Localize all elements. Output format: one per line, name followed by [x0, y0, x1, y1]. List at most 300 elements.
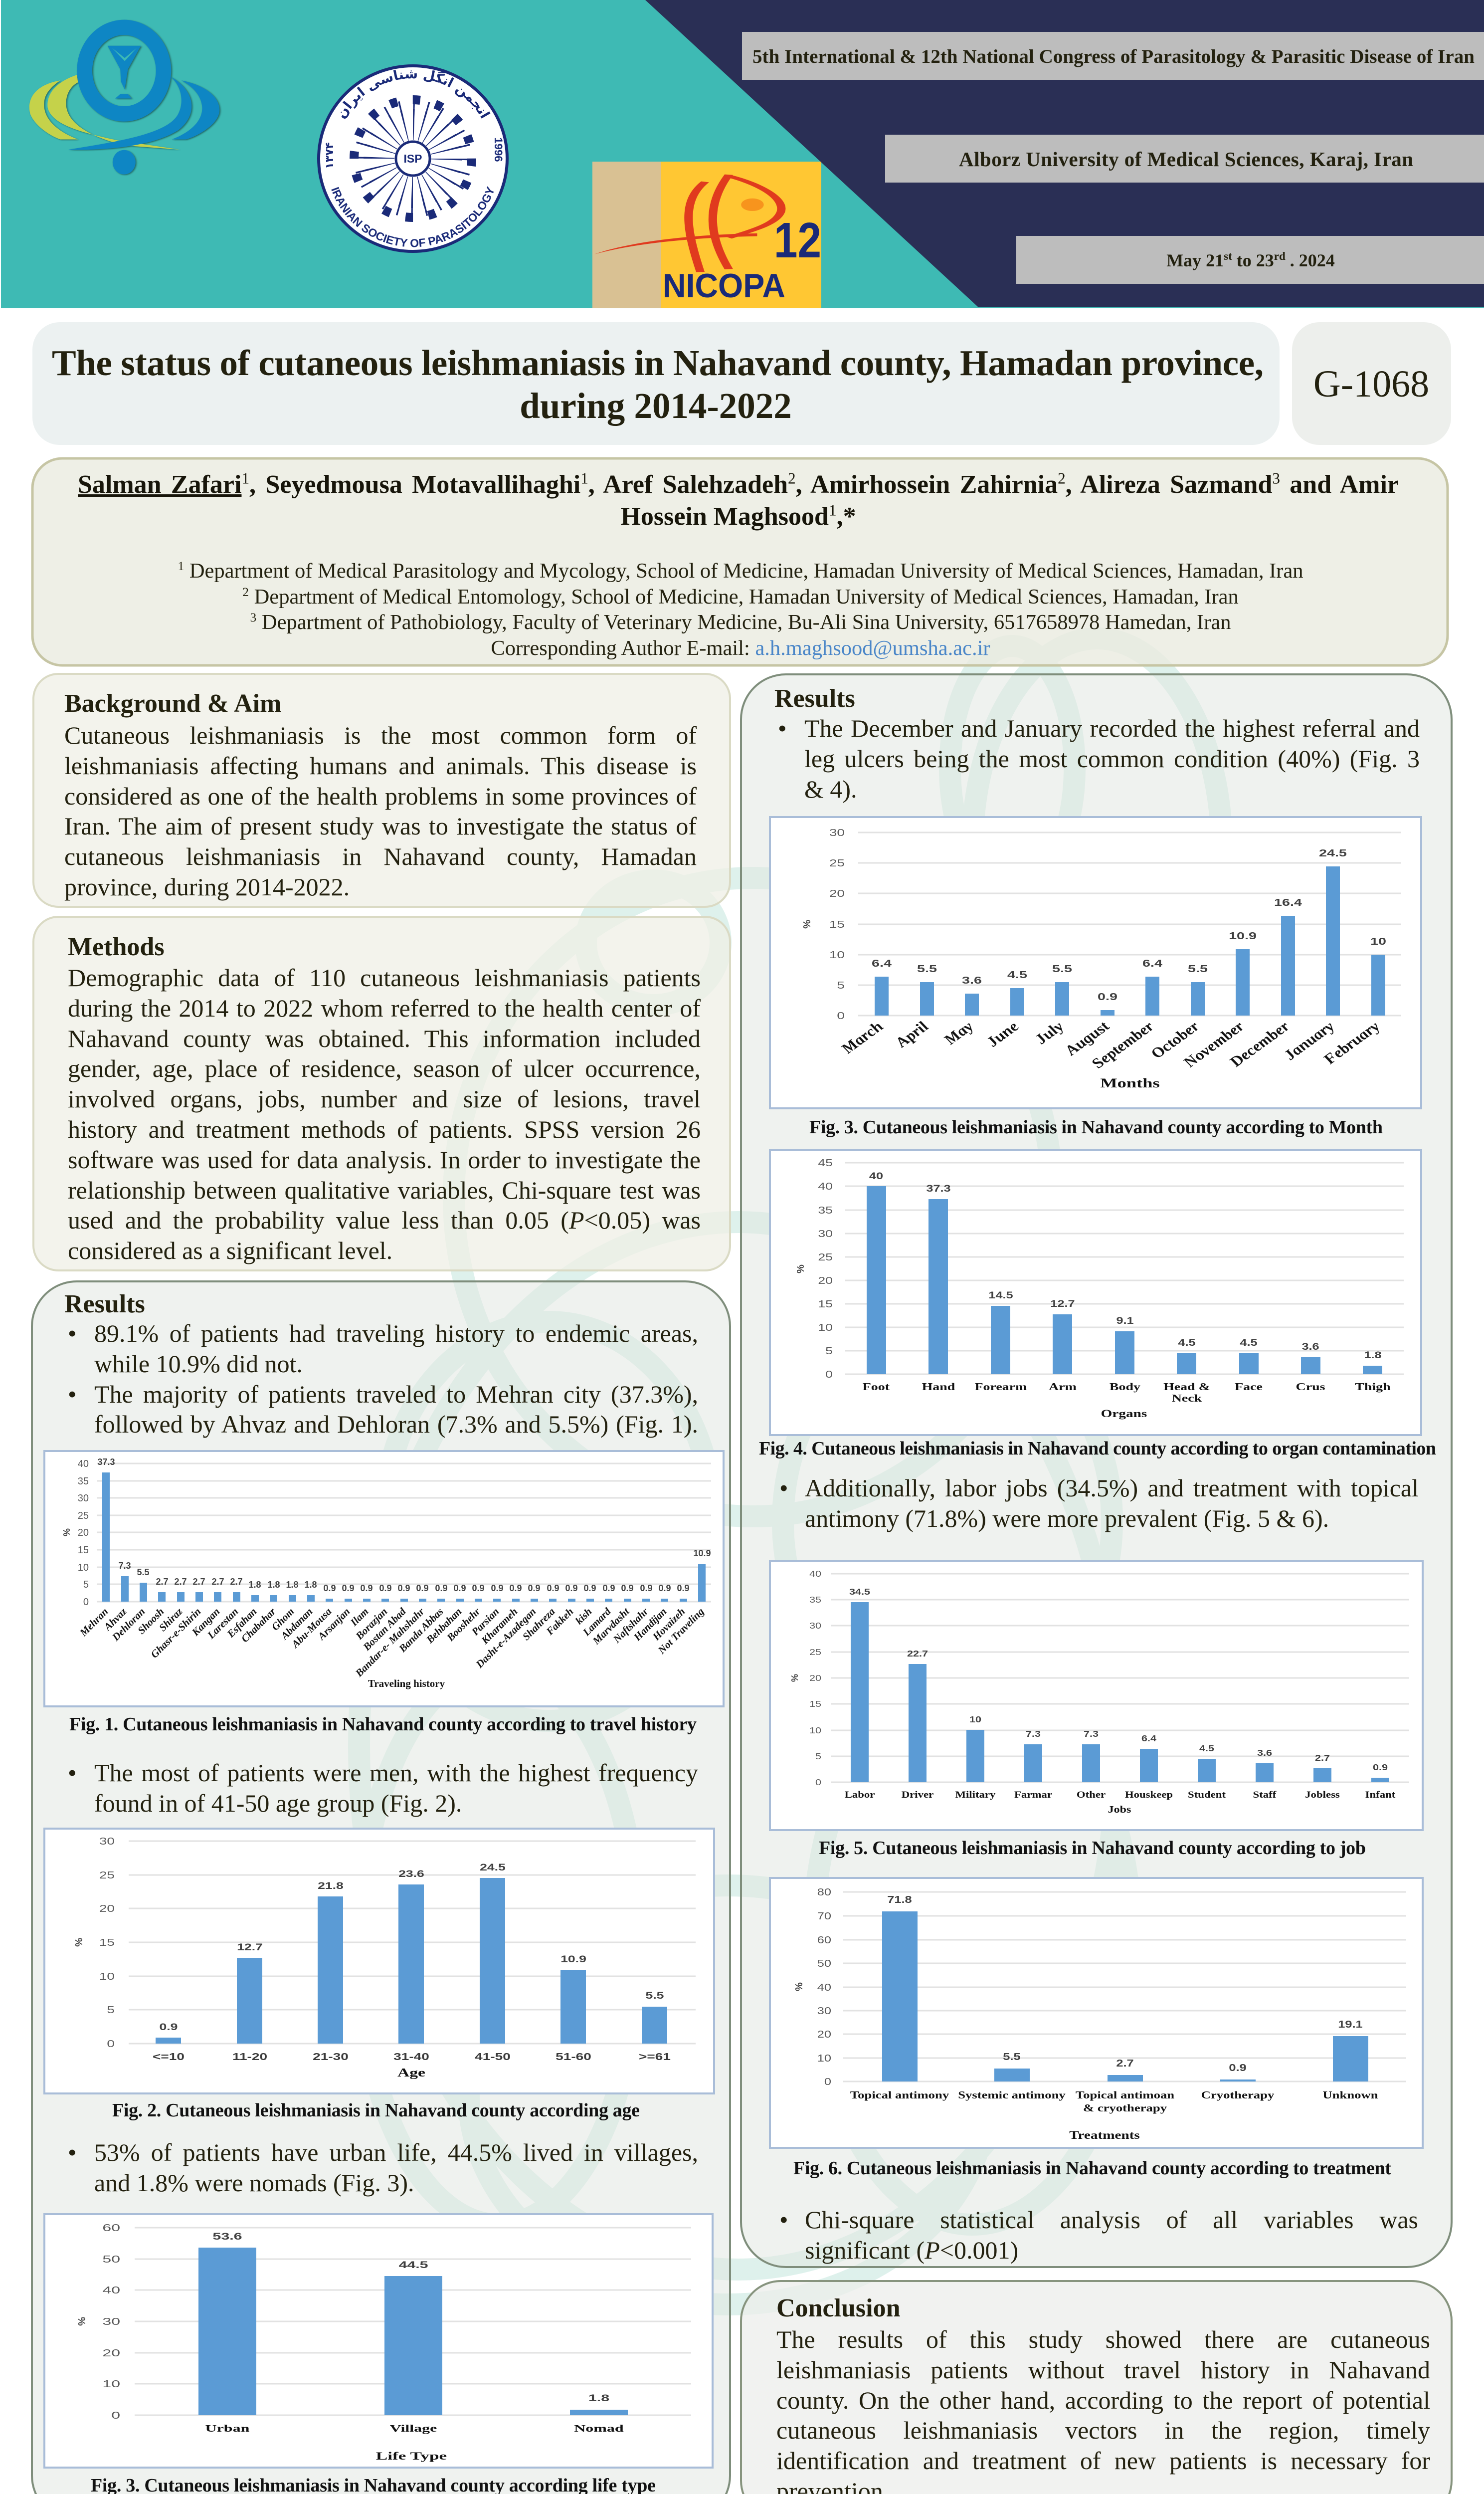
text block: chi-square bullet [779, 2205, 1418, 2267]
chart: figure 6 treatment: 0 [824, 2076, 831, 2087]
chart: figure 3 life type: Nomad [574, 2423, 624, 2434]
chart: figure 4 organs: Face [1235, 1381, 1263, 1393]
caption: figure 4: Fig. 4. Cutaneous leishmaniasis in Nahavand county according to organ contamination [759, 1438, 1436, 1459]
chart: figure 6 treatment: Systemic antimony [958, 2090, 1066, 2101]
text block: conclusion: leishmaniasis patients without travel history in Nahavand [776, 2356, 1430, 2384]
chart: figure 6 treatment: % [794, 1982, 805, 1991]
chart: figure 1 travel history: Ahvaz [101, 1605, 129, 1634]
chart: figure 1 travel history: 1.8 [267, 1580, 280, 1590]
panel: background and aim [33, 674, 730, 907]
chart: figure 5 jobs: Student [1188, 1789, 1226, 1800]
chart: figure 4 organs: % [795, 1264, 806, 1273]
text block: life type bullet: 53% of patients have urban life, 44.5% lived in villages, [94, 2138, 698, 2166]
chart: figure 1 travel history: 2.7 [156, 1577, 169, 1587]
text block: jobs and treatment bullet: Additionally, labor jobs (34.5%) and treatment with topical [805, 1474, 1419, 1502]
chart: months: August [1060, 1019, 1114, 1058]
chart: figure 5 jobs: 15 [809, 1699, 821, 1709]
chart: figure 6 treatment: 19.1 [1338, 2019, 1363, 2030]
chart: figure 5 jobs: 7.3 [1026, 1729, 1041, 1739]
chart: figure 1 travel history: Traveling history [368, 1677, 445, 1689]
chart: months: February [1318, 1019, 1385, 1067]
text block: travel history bullets: • [68, 1319, 77, 1347]
navy diagonal panel [645, 0, 1484, 307]
chart: figure 1 travel history: Hovaizeh [650, 1606, 688, 1643]
chart: figure 5 jobs: Military [955, 1789, 996, 1800]
text block: gender and age bullet: found in of 41-50 age group (Fig. 2). [94, 1789, 462, 1817]
chart: figure 5 jobs: 35 [809, 1595, 821, 1605]
university bar [885, 135, 1484, 183]
chart: figure 3 life type: 40 [102, 2285, 120, 2295]
chart: figure 4 organs: Body [1110, 1381, 1141, 1393]
chart: months: Months [1100, 1076, 1160, 1090]
chart: months: December [1225, 1019, 1295, 1070]
date bar [1016, 236, 1484, 284]
chart: figure 5 jobs: 0.9 [1373, 1763, 1388, 1773]
chart: figure 1 travel history: Esfahan [224, 1606, 259, 1640]
chart: figure 1 travel history: 35 [78, 1476, 89, 1487]
chart: figure 1 travel history: 0.9 [379, 1583, 392, 1593]
chart: figure 3 life type: Urban [205, 2423, 250, 2434]
chart: figure 4 organs: 1.8 [1364, 1350, 1382, 1360]
chart: figure 2 age: 21-30 [313, 2052, 349, 2063]
chart: figure 1 travel history: 5.5 [137, 1567, 150, 1577]
chart: months: 10.9 [1229, 930, 1257, 942]
chart: figure 1 travel history: Ghasr-e-Shirin [148, 1606, 203, 1661]
chart: figure 1 travel history: Abdanan [278, 1606, 315, 1643]
chart: figure 1 travel history: kish [573, 1606, 594, 1627]
text block: methods: used and the probability value less than 0.05 (P<0.05) was [68, 1206, 701, 1234]
chart: figure 6 treatment: Topical antimony [850, 2090, 949, 2101]
icon: congress logo [29, 20, 219, 175]
affiliations: 3 Department of Pathobiology, Faculty of Veterinary Medicine, Bu-Ali Sina University, 6517658978 Hamedan, Iran [250, 610, 1231, 634]
background watermark [359, 638, 1222, 2304]
chart: figure 3 life type: Village [390, 2423, 437, 2434]
chart: figure 1 travel history: 2.7 [230, 1577, 243, 1587]
text block: gender and age bullet: • [68, 1759, 77, 1787]
chart: figure 4 organs: 12.7 [1050, 1298, 1075, 1309]
chart: figure 3 life type: 20 [102, 2347, 120, 2358]
chart: figure 6 treatment [770, 1878, 1423, 2148]
chart: figure 6 treatment: 5.5 [1003, 2051, 1021, 2062]
chart: figure 5 jobs: Farmar [1014, 1789, 1052, 1800]
chart: figure 5 jobs: 22.7 [907, 1649, 928, 1659]
chart: figure 1 travel history: 0.9 [435, 1583, 448, 1593]
chart: months [770, 817, 1421, 1108]
chart: figure 4 organs: 35 [818, 1205, 833, 1216]
icon: NICOPA 12 logo: NICOPA [663, 267, 785, 305]
chart: figure 2 age: 21.8 [318, 1880, 344, 1891]
chart: figure 5 jobs: 25 [809, 1648, 821, 1658]
chart: figure 3 life type: 50 [102, 2254, 120, 2265]
chart: figure 4 organs: 9.1 [1116, 1315, 1134, 1326]
chart: figure 5 jobs: Houskeep [1125, 1789, 1173, 1800]
chart: figure 1 travel history: Shahreza [520, 1606, 557, 1643]
chart: figure 2 age: 30 [99, 1836, 115, 1847]
chart: figure 5 jobs: % [790, 1674, 800, 1682]
caption: figure 5: Fig. 5. Cutaneous leishmaniasis in Nahavand county according to job [819, 1838, 1366, 1859]
caption: figure 1: Fig. 1. Cutaneous leishmaniasis in Nahavand county according to travel history [69, 1714, 697, 1735]
chart: figure 1 travel history: 25 [78, 1510, 89, 1521]
chart: figure 6 treatment: 0.9 [1229, 2062, 1247, 2073]
text block: travel history bullets: while 10.9% did not. [94, 1350, 303, 1378]
chart: figure 2 age [44, 1829, 714, 2093]
chart: figure 4 organs: Forearm [975, 1381, 1027, 1393]
chart: figure 4 organs: 45 [818, 1157, 833, 1168]
chart: figure 6 treatment: 40 [817, 1982, 831, 1993]
chart: figure 5 jobs: 40 [809, 1569, 821, 1579]
chart: figure 4 organs: 4.5 [1178, 1337, 1196, 1348]
icon: NICOPA 12 logo: 12 [774, 212, 821, 268]
chart: months: 5.5 [1188, 963, 1208, 975]
text block: methods: relationship between qualitative variables, Chi-square test was [68, 1176, 701, 1204]
chart: figure 2 age: 5.5 [645, 1990, 664, 2001]
chart: figure 6 treatment: & cryotherapy [1083, 2103, 1167, 2114]
text block: methods: considered as a significant level. [68, 1237, 392, 1264]
chart: figure 4 organs: 40 [818, 1181, 833, 1192]
chart: figure 2 age: 20 [99, 1903, 115, 1914]
panel: conclusion [741, 2281, 1452, 2494]
chart: months: 15 [829, 919, 845, 930]
chart: figure 1 travel history: Bandar-e- Mahshahr [353, 1605, 427, 1679]
chart: figure 2 age: 0 [107, 2039, 115, 2050]
chart: figure 1 travel history: 0.9 [547, 1583, 559, 1593]
chart: figure 1 travel history: Behbahan [423, 1606, 464, 1646]
chart: figure 1 travel history: 2.7 [192, 1577, 205, 1587]
chart: figure 5 jobs: Infant [1365, 1789, 1395, 1800]
chart: figure 1 travel history: Lamard [580, 1605, 613, 1639]
chart: months: 10 [829, 950, 845, 961]
icon: Iranian Society of Parasitology seal: 1996 [492, 138, 505, 162]
text block: months and organs bullet: • [778, 714, 787, 742]
chart: figure 3 life type [44, 2214, 713, 2468]
text block: months and organs bullet: & 4). [804, 775, 857, 803]
chart: figure 1 travel history: Handijan [631, 1606, 669, 1644]
chart: figure 4 organs: Neck [1172, 1393, 1202, 1404]
chart: figure 5 jobs: Other [1077, 1789, 1106, 1800]
authors: Salman Zafari1, Seyedmousa Motavallihaghi1, Aref Salehzadeh2, Amirhossein Zahirnia2, Alireza Sazmand3 and Amir [78, 470, 1399, 499]
chart: figure 5 jobs: 6.4 [1141, 1734, 1156, 1744]
chart: figure 4 organs: Thigh [1355, 1381, 1391, 1393]
chart: figure 1 travel history: 0.9 [509, 1583, 522, 1593]
chart: months: 30 [829, 828, 845, 838]
text block: conclusion [776, 2324, 1430, 2494]
text block: gender and age bullet [68, 1758, 698, 1820]
chart: figure 1 travel history: Abu-Mousa [289, 1606, 334, 1651]
university bar: Alborz University of Medical Sciences, Karaj, Iran [959, 148, 1413, 171]
chart: figure 2 age: <=10 [153, 2052, 185, 2063]
chart: figure 1 travel history: 0.9 [640, 1583, 653, 1593]
chart: figure 3 life type: 60 [102, 2222, 120, 2233]
chart: figure 4 organs: 25 [818, 1251, 833, 1262]
chart: figure 2 age: 5 [107, 2005, 115, 2016]
heading: methods: Methods [68, 933, 165, 961]
chart: figure 1 travel history: 0.9 [360, 1583, 373, 1593]
seal: sunburst [354, 100, 472, 217]
chart: figure 2 age: 31-40 [393, 2052, 429, 2063]
text block: chi-square bullet: significant (P<0.001) [805, 2236, 1018, 2264]
chart: figure 5 jobs: 0 [815, 1778, 821, 1788]
chart: figure 5 jobs: Staff [1253, 1789, 1277, 1800]
heading: background and aim: Background & Aim [64, 689, 281, 718]
text block: methods: history and treatment methods of patients. SPSS version 26 [68, 1115, 701, 1143]
title text: The status of cutaneous leishmaniasis in Nahavand county, Hamadan province, [52, 343, 1264, 383]
chart: figure 4 organs: Crus [1296, 1381, 1325, 1393]
chart: months: 0 [837, 1011, 845, 1022]
chart: figure 6 treatment: Cryotherapy [1201, 2090, 1274, 2101]
text block: methods: during the 2014 to 2022 whom referred to the health center of [68, 994, 701, 1022]
chart: figure 2 age: 23.6 [398, 1869, 424, 1879]
chart: figure 2 age: 51-60 [556, 2052, 591, 2063]
chart: figure 4 organs: 4.5 [1240, 1337, 1258, 1348]
authors [78, 469, 1399, 534]
chart: figure 4 organs: 10 [818, 1322, 833, 1333]
chart: months: 6.4 [1142, 958, 1162, 969]
chart: figure 2 age: 0.9 [160, 2022, 178, 2032]
chart: figure 4 organs: 0 [825, 1369, 833, 1380]
chart: figure 1 travel history: 1.8 [304, 1580, 317, 1590]
chart: figure 1 travel history: 15 [78, 1545, 89, 1556]
chart: figure 1 travel history: 20 [78, 1527, 89, 1538]
chart: figure 4 organs: Organs [1101, 1407, 1147, 1420]
chart: figure 6 treatment: 71.8 [887, 1894, 912, 1905]
chart: figure 4 organs: Hand [922, 1381, 955, 1393]
panel: methods [33, 917, 730, 1270]
chart: figure 1 travel history: Chabahar [239, 1605, 278, 1645]
authors: Hossein Maghsood1,* [620, 502, 856, 531]
chart: months: October [1146, 1019, 1204, 1061]
chart: figure 3 life type: 53.6 [212, 2232, 242, 2242]
chart: months: 16.4 [1274, 897, 1302, 908]
chart: figure 5 jobs: 3.6 [1257, 1748, 1272, 1758]
text block: life type bullet: • [68, 2138, 77, 2166]
chart: figure 6 treatment: 60 [817, 1934, 831, 1945]
chart: figure 1 travel history: Shiraz [157, 1605, 185, 1634]
chart: figure 6 treatment: 10 [817, 2053, 831, 2064]
heading: results right: Results [774, 684, 855, 713]
text block: conclusion: cutaneous leishmaniasis vectors in the region, timely [776, 2416, 1430, 2444]
chart: figure 1 travel history: Bostan Abad [361, 1605, 408, 1653]
chart: figure 4 organs: 30 [818, 1228, 833, 1239]
affiliations [82, 558, 1399, 663]
chart: figure 1 travel history: Parsian [469, 1606, 502, 1638]
chart: months: November [1178, 1019, 1249, 1070]
chart: months: % [802, 920, 813, 929]
chart: figure 1 travel history: 0.9 [472, 1583, 485, 1593]
chart: figure 2 age: 10 [99, 1971, 115, 1982]
chart: figure 1 travel history: 0.9 [677, 1583, 690, 1593]
text block: methods: software was used for data analysis. In order to investigate the [68, 1146, 701, 1174]
chart: figure 5 jobs: 10 [969, 1715, 981, 1725]
chart: figure 2 age: 11-20 [232, 2052, 267, 2063]
text block: background: Iran. The aim of present study was to investigate the status of [64, 812, 697, 840]
chart: figure 3 life type: 44.5 [398, 2260, 428, 2270]
chart: figure 1 travel history: 0.9 [621, 1583, 634, 1593]
chart: figure 6 treatment: 2.7 [1116, 2058, 1134, 2069]
chart: figure 1 travel history: 10 [78, 1562, 89, 1573]
chart: figure 6 treatment: 70 [817, 1910, 831, 1921]
text block: travel history bullets: 89.1% of patients had traveling history to endemic areas, [94, 1319, 698, 1347]
chart: figure 1 travel history: 0.9 [323, 1583, 336, 1593]
chart: figure 1 travel history: 2.7 [211, 1577, 224, 1587]
text block: background [64, 720, 697, 905]
chart: figure 1 travel history: Fakkeh [544, 1606, 576, 1638]
chart: months: 5 [837, 980, 845, 991]
icon: Iranian Society of Parasitology seal: ISP [403, 152, 422, 165]
chart: figure 1 travel history: 0.9 [397, 1583, 410, 1593]
chart: figure 1 travel history: Banda Abbas [396, 1606, 446, 1655]
chart: figure 2 age: 12.7 [237, 1942, 263, 1952]
caption: figure 6: Fig. 6. Cutaneous leishmaniasis in Nahavand county according to treatment [793, 2158, 1391, 2179]
congress name bar [742, 32, 1484, 80]
chart: figure 1 travel history: 0 [83, 1597, 89, 1608]
title text [52, 343, 1264, 426]
chart: figure 1 travel history: Larestan [204, 1606, 241, 1642]
chart: figure 5 jobs: Jobless [1305, 1789, 1340, 1800]
chart: figure 1 travel history: Ghom [269, 1606, 297, 1633]
chart: figure 1 travel history: 5 [83, 1579, 89, 1590]
chart: months: 5.5 [917, 963, 937, 975]
chart: months: 0.9 [1098, 991, 1117, 1003]
chart: figure 4 organs: 20 [818, 1275, 833, 1286]
chart: months: 10 [1370, 936, 1386, 947]
chart: figure 2 age: 15 [99, 1937, 115, 1948]
chart: figure 1 travel history: 7.3 [118, 1561, 131, 1571]
chart: figure 5 jobs: 5 [815, 1752, 821, 1762]
text block: travel history bullets: The majority of patients traveled to Mehran city (37.3%), [94, 1380, 698, 1408]
chart: figure 4 organs: 3.6 [1301, 1341, 1319, 1352]
icon: Iranian Society of Parasitology seal: ۱۳۷۴ [324, 142, 336, 169]
chart: months: 20 [829, 888, 845, 899]
panel: authors and affiliations [32, 458, 1448, 665]
header banner [1, 0, 1484, 308]
icon: Iranian Society of Parasitology seal: انجمن انگل شناسی ایران [341, 70, 491, 119]
panel: results left column [32, 1281, 730, 2494]
chart: figure 1 travel history: 0.9 [528, 1583, 541, 1593]
chart: figure 5 jobs: 4.5 [1199, 1744, 1214, 1754]
text block: gender and age bullet: The most of patients were men, with the highest frequency [94, 1759, 698, 1787]
chart: figure 1 travel history: 0.9 [342, 1583, 355, 1593]
heading: results: Results [64, 1290, 145, 1318]
icon: Iranian Society of Parasitology seal [317, 64, 509, 253]
text block: chi-square bullet: Chi-square statistical analysis of all variables was [805, 2206, 1418, 2234]
chart: figure 4 organs: Foot [863, 1381, 890, 1393]
chart: figure 5 jobs: 2.7 [1315, 1753, 1330, 1763]
date bar: . 2024 [1286, 250, 1335, 270]
text block: life type bullet: and 1.8% were nomads (Fig. 3). [94, 2169, 414, 2197]
chart: figure 1 travel history: 10.9 [693, 1548, 711, 1558]
chart: figure 1 travel history: Arsanjan [315, 1606, 353, 1643]
chart: figure 1 travel history: Dasht-e-Azadegan [473, 1606, 539, 1670]
caption: figure 3 months: Fig. 3. Cutaneous leishmaniasis in Nahavand county according to Month [809, 1117, 1383, 1138]
icon: Iranian Society of Parasitology seal: IRANIAN SOCIETY OF PARASITOLOGY [331, 186, 494, 247]
chart: figure 5 jobs: 30 [809, 1621, 821, 1631]
chart: figure 6 treatment: Treatments [1069, 2129, 1140, 2141]
chart: months: April [890, 1020, 933, 1050]
text block: methods [68, 963, 701, 1268]
chart: figure 1 travel history: 40 [78, 1458, 89, 1469]
caption: figure 2: Fig. 2. Cutaneous leishmaniasis in Nahavand county according age [112, 2100, 640, 2121]
chart: figure 5 jobs: Jobs [1108, 1804, 1131, 1815]
date bar: to 23 [1232, 250, 1274, 270]
chart: figure 1 travel history: Kangan [189, 1606, 222, 1639]
chart: figure 1 travel history: Naftshahr [610, 1605, 651, 1646]
text block: jobs and treatment bullet: • [779, 1474, 788, 1502]
chart: figure 2 age: 25 [99, 1870, 115, 1881]
text block: methods: Demographic data of 110 cutaneous leishmaniasis patients [68, 964, 701, 992]
chart: months: 25 [829, 858, 845, 869]
chart: figure 5 jobs: Driver [902, 1789, 933, 1800]
congress name bar: 5th International & 12th National Congress of Parasitology & Parasitic Disease of Iran [752, 46, 1475, 67]
date bar: st [1224, 250, 1232, 262]
code panel: G-1068 [1292, 322, 1451, 445]
chart: figure 1 travel history: Mehran [77, 1606, 111, 1639]
chart: figure 1 travel history: 30 [78, 1493, 89, 1504]
chart: figure 6 treatment: 30 [817, 2005, 831, 2016]
chart: figure 2 age: Age [397, 2066, 425, 2079]
chart: figure 5 jobs: 7.3 [1084, 1729, 1099, 1739]
text block: conclusion: county. On the other hand, according to the report of potential [776, 2386, 1430, 2414]
chart: figure 2 age: 10.9 [560, 1954, 586, 1964]
chart: months: 3.6 [962, 975, 982, 986]
chart: figure 1 travel history: Booshehr [444, 1605, 483, 1644]
affiliations: 1 Department of Medical Parasitology and Mycology, School of Medicine, Hamadan University of Medical Sciences, Hamadan, Iran [178, 559, 1303, 583]
chart: figure 1 travel history: Ilam [348, 1606, 371, 1629]
text block: life type bullet [68, 2137, 698, 2199]
text block: months and organs bullet: leg ulcers being the most common condition (40%) (Fig. 3 [804, 745, 1420, 773]
chart: figure 1 travel history: Kharameh [479, 1606, 520, 1647]
text block: jobs and treatment bullet [779, 1473, 1419, 1535]
chart: figure 1 travel history: 37.3 [97, 1457, 115, 1467]
chart: figure 2 age: 41-50 [475, 2052, 511, 2063]
chart: figure 6 treatment: 20 [817, 2029, 831, 2040]
chart: figure 5 jobs: 20 [809, 1673, 821, 1683]
chart: figure 4 organs: 37.3 [926, 1183, 951, 1194]
heading: conclusion: Conclusion [776, 2294, 901, 2322]
chart: figure 1 travel history: 0.9 [453, 1583, 466, 1593]
date bar: May 21 [1166, 250, 1224, 270]
date bar: rd [1274, 250, 1286, 262]
chart: figure 2 age: >=61 [639, 2052, 671, 2063]
chart: figure 5 jobs: 10 [809, 1726, 821, 1736]
chart: figure 1 travel history [44, 1451, 724, 1706]
chart: figure 1 travel history: 0.9 [491, 1583, 504, 1593]
chart: months: July [1030, 1019, 1069, 1047]
chart: figure 3 life type: 1.8 [588, 2393, 609, 2403]
chart: figure 4 organs: Arm [1049, 1381, 1077, 1393]
text block: jobs and treatment bullet: antimony (71.8%) were more prevalent (Fig. 5 & 6). [805, 1504, 1329, 1532]
text block: travel history bullets: followed by Ahvaz and Dehloran (7.3% and 5.5%) (Fig. 1). [94, 1410, 698, 1438]
chart: figure 1 travel history: 1.8 [286, 1580, 299, 1590]
text block: conclusion: The results of this study showed there are cutaneous [776, 2325, 1430, 2353]
text block: months and organs bullet [778, 713, 1420, 806]
chart: figure 3 life type: 30 [102, 2316, 120, 2327]
text block: travel history bullets: • [68, 1380, 77, 1408]
chart: figure 4 organs: Head & [1163, 1381, 1210, 1393]
chart: figure 1 travel history: 0.9 [565, 1583, 578, 1593]
chart: figure 1 travel history: 1.8 [248, 1580, 261, 1590]
chart: figure 1 travel history: Marvdasht [590, 1605, 632, 1647]
chart: figure 4 organs: 40 [869, 1171, 883, 1181]
icon: NICOPA 12 logo [592, 162, 821, 308]
chart: figure 5 jobs [770, 1561, 1423, 1830]
text block: background: cutaneous leishmaniasis in Nahavand county, Hamadan [64, 842, 697, 870]
text block: background: province, during 2014-2022. [64, 873, 350, 901]
chart: figure 3 life type: 10 [102, 2378, 120, 2389]
chart: months: June [981, 1020, 1023, 1050]
chart: months: 24.5 [1319, 847, 1347, 859]
chart: figure 3 life type: Life Type [376, 2450, 447, 2462]
chart: months: 5.5 [1052, 963, 1072, 975]
